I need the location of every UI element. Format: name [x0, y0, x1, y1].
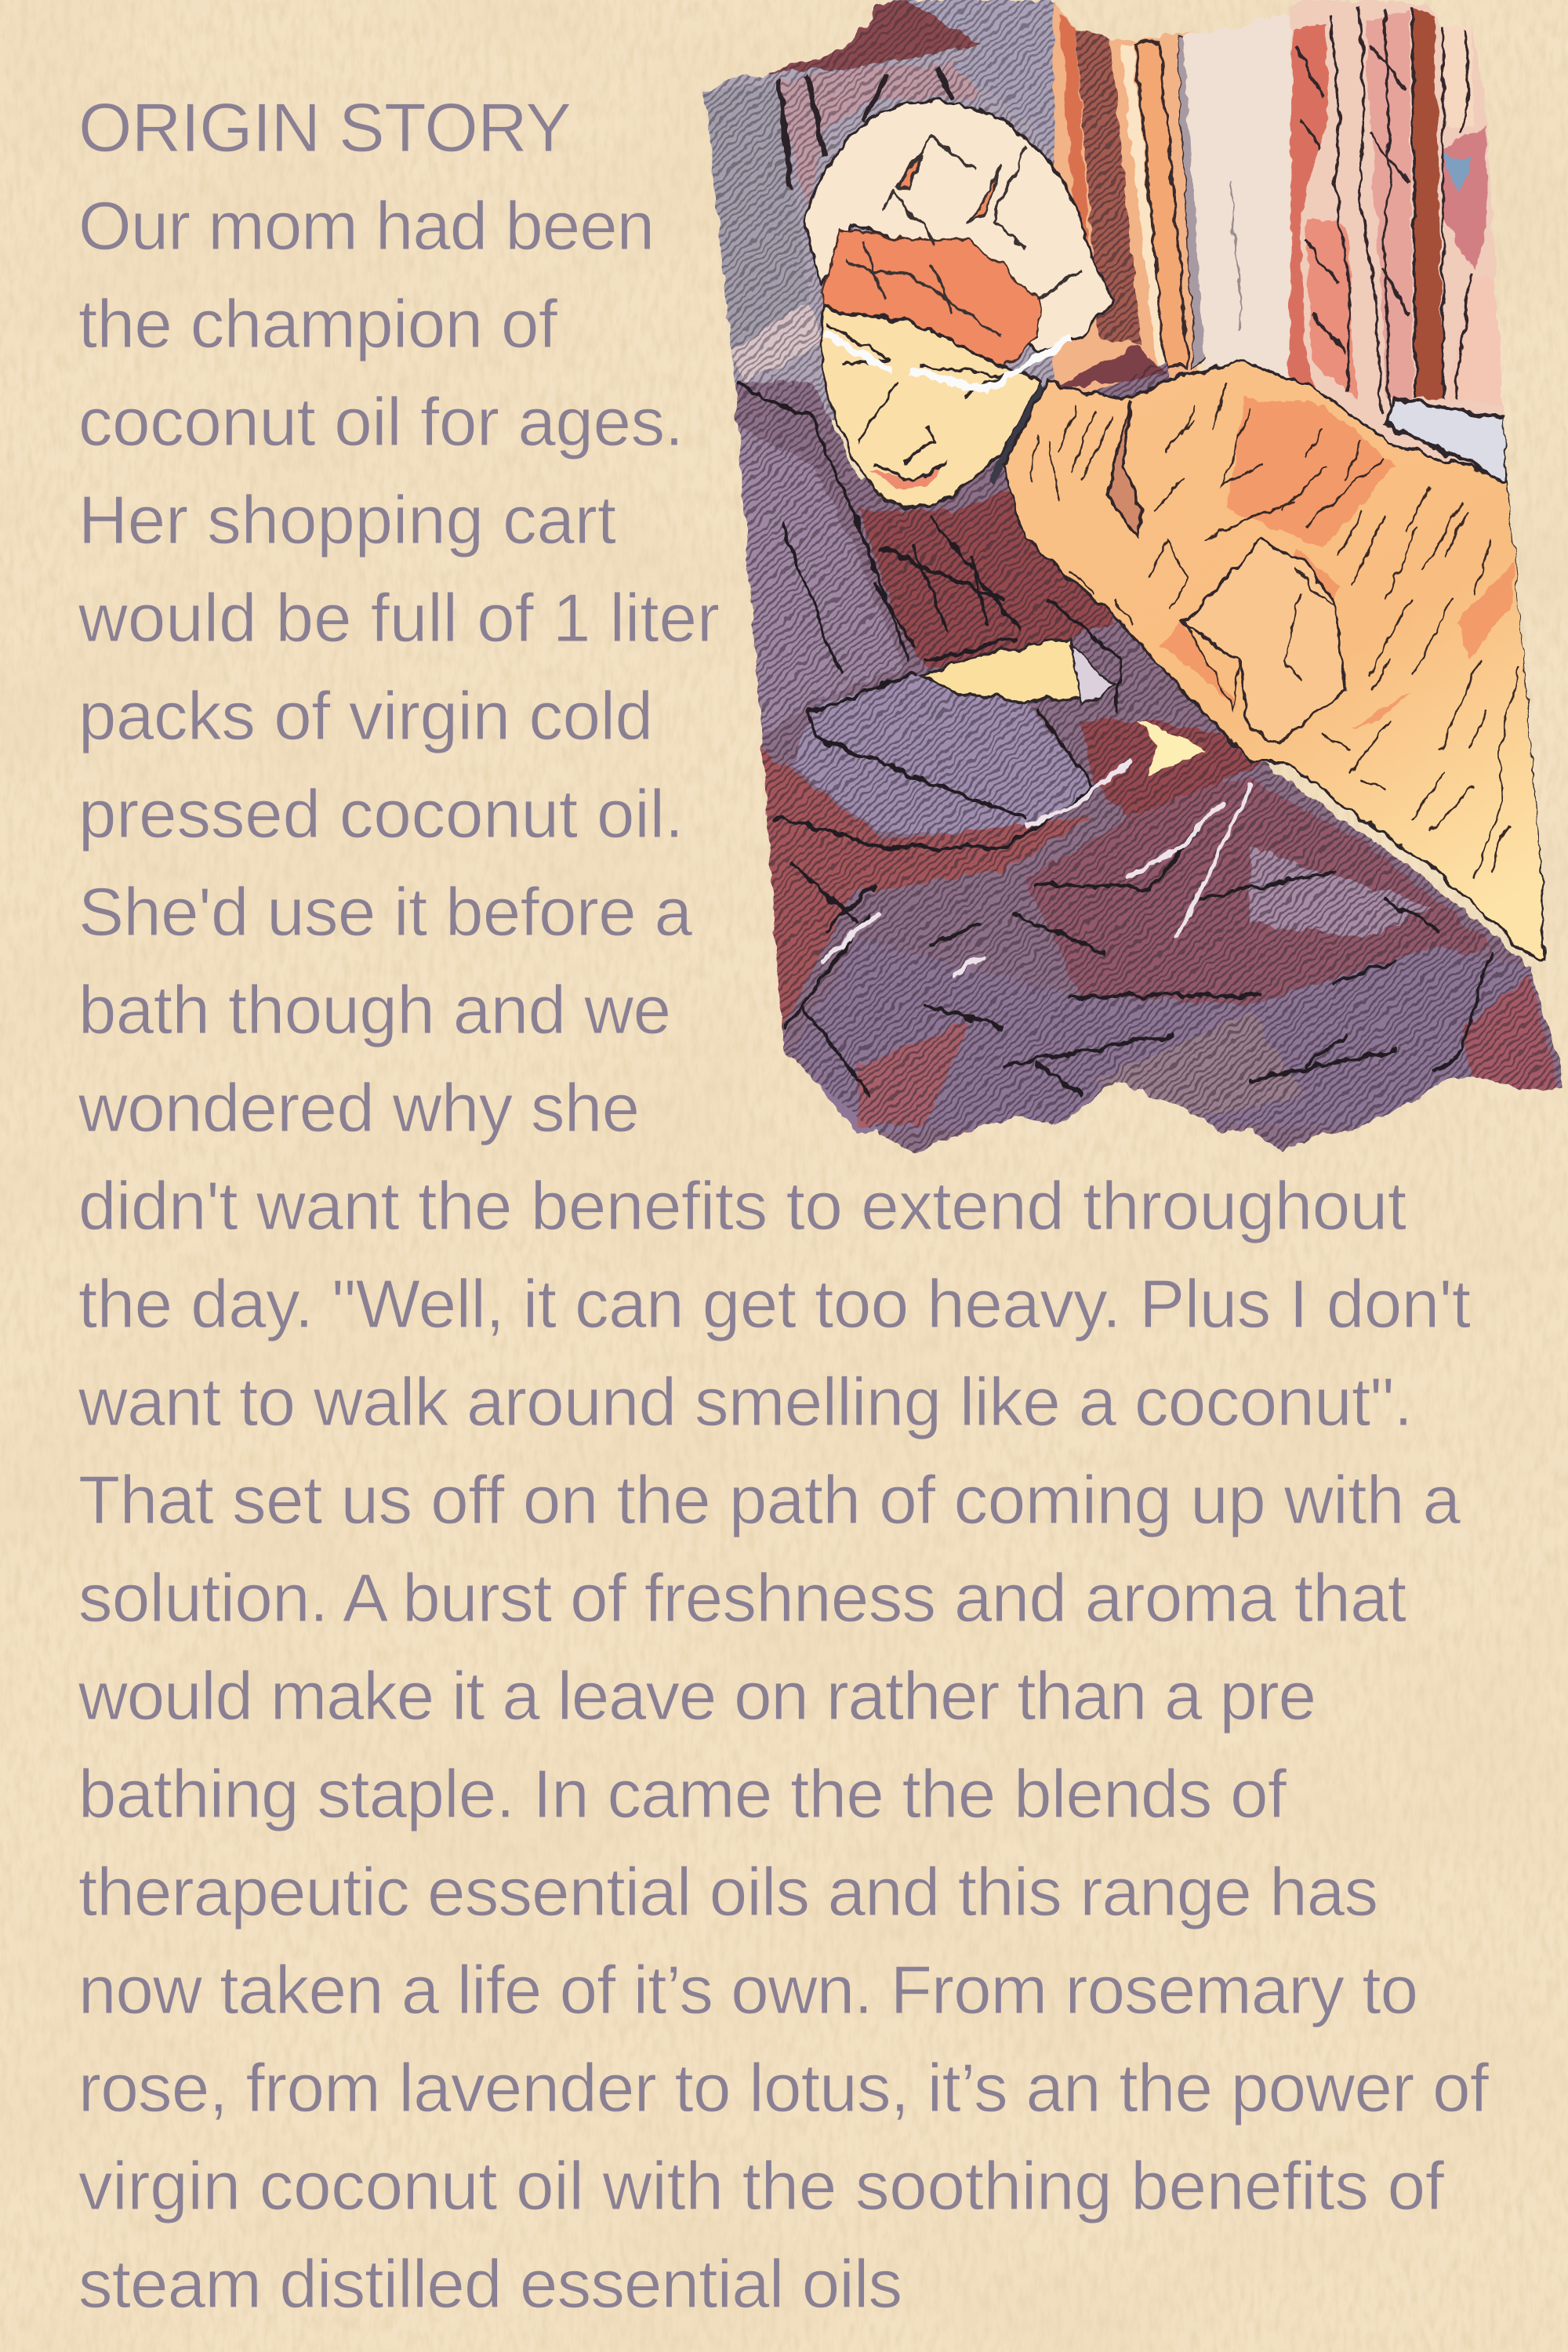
body text: would be full of 1 liter	[78, 580, 720, 656]
dog	[1004, 360, 1544, 960]
striped curtain	[1054, 0, 1205, 420]
body text: the champion of	[78, 286, 558, 362]
body text: bathing staple. In came the the blends of	[78, 1756, 1287, 1832]
dog: paw	[1183, 540, 1345, 742]
body text: Our mom had been	[78, 188, 655, 264]
blanket and robe	[735, 345, 1568, 1163]
hand	[920, 637, 1205, 776]
glasses	[824, 334, 1071, 390]
body text: pressed coconut oil.	[78, 776, 684, 852]
face	[822, 309, 1071, 507]
dog: red-orange patches	[1160, 397, 1513, 728]
body text: would make it a leave on rather than a pre	[78, 1658, 1316, 1734]
body text: the day. "Well, it can get too heavy. Plus I don't	[78, 1266, 1471, 1342]
white highlights on folds	[824, 761, 1250, 975]
hair cap	[804, 101, 1112, 353]
illustration: woman cuddling dog, torn-edge photo	[690, 0, 1568, 1163]
body text: rose, from lavender to lotus, it’s an the power of	[78, 2050, 1490, 2126]
body text: steam distilled essential oils	[78, 2246, 902, 2322]
body text: That set us off on the path of coming up with a	[78, 1462, 1461, 1538]
body text: now taken a life of it’s own. From rosemary to	[78, 1952, 1418, 2028]
body text: She'd use it before a	[78, 874, 693, 950]
title: ORIGIN STORY: ORIGIN STORY	[78, 89, 572, 166]
fabric fold lines	[738, 383, 1490, 1095]
patterned curtain right	[1289, 0, 1519, 525]
body text: solution. A burst of freshness and aroma that	[78, 1560, 1406, 1636]
body text: wondered why she	[78, 1070, 640, 1146]
hair folds	[847, 139, 1082, 338]
body text: want to walk around smelling like a coconut".	[78, 1364, 1413, 1440]
dog: ear	[1107, 401, 1141, 536]
pillow and backdrop	[690, 0, 1082, 420]
dog: fur cracks	[1032, 383, 1519, 878]
pale window	[1183, 15, 1306, 383]
body text: packs of virgin cold	[78, 678, 653, 754]
body text: virgin coconut oil with the soothing benefits of	[78, 2148, 1445, 2224]
body text: coconut oil for ages.	[78, 384, 684, 460]
body text: didn't want the benefits to extend throughout	[78, 1168, 1406, 1244]
body text: Her shopping cart	[78, 482, 616, 558]
body text: therapeutic essential oils and this range has	[78, 1854, 1378, 1930]
headband	[822, 229, 1040, 368]
body text: bath though and we	[78, 972, 671, 1048]
